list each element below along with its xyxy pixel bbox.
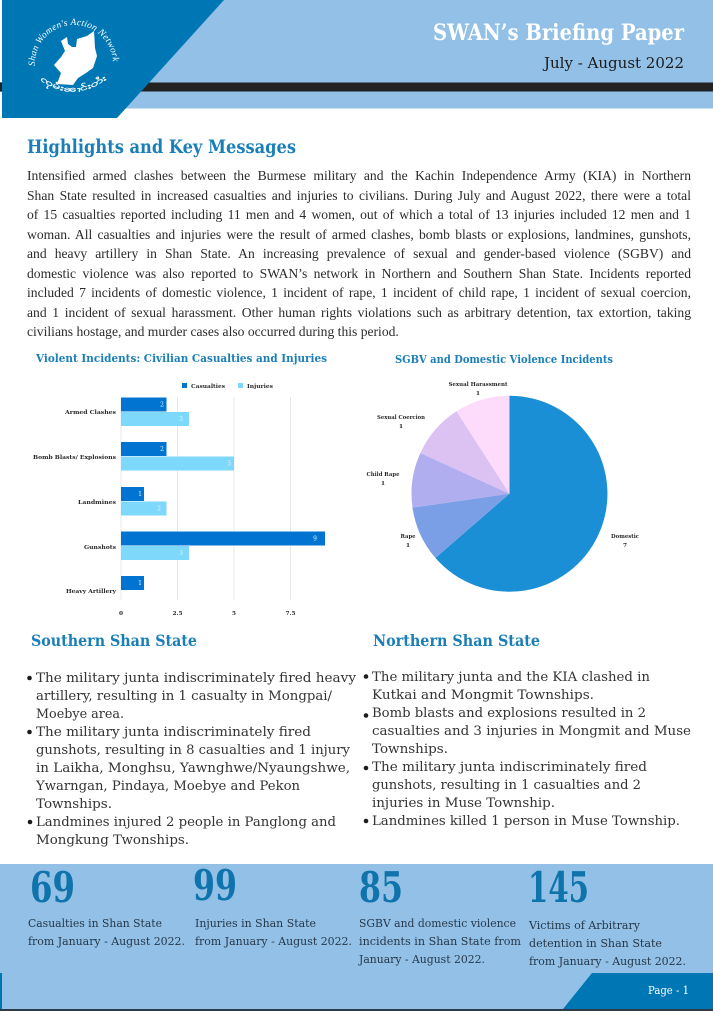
stat: SGBV incidents <box>358 863 521 966</box>
text block: highlights paragraph: woman. All casualties and injuries were the result of armed clashes, bomb blasts or explosions, landmines, gunshots, <box>27 226 691 242</box>
bars: armed clashes <box>64 398 189 426</box>
header title: SWAN’s Briefing Paper <box>433 20 684 46</box>
panel: southern shan state <box>27 631 356 848</box>
northern heading: Northern Shan State <box>373 631 540 650</box>
text block: highlights paragraph: civilians hostage, and murder cases also occurred during this period. <box>27 324 399 339</box>
northern bullets <box>364 670 691 829</box>
pie labels: Domestic <box>611 534 639 540</box>
pie labels: 7 <box>623 543 627 549</box>
logo: circular organisation name: Shan Women's Action Network <box>28 18 120 66</box>
header date: July - August 2022 <box>542 54 684 72</box>
southern bullets <box>27 671 356 848</box>
northern bullets: Bomb blasts and explosions resulted in 2 <box>372 706 646 721</box>
southern bullets: Mongkung Twonships. <box>36 833 189 848</box>
southern bullets: in Laikha, Monghsu, Yawnghwe/Nyaungshwe, <box>36 761 350 776</box>
bar chart legend <box>182 383 274 390</box>
pie labels: 1 <box>476 391 480 397</box>
bar chart axis labels: 5 <box>232 611 236 617</box>
bars: bomb blasts <box>33 442 234 470</box>
pie labels: Sexual Coercion <box>377 415 426 421</box>
bar chart legend: Casualties <box>191 384 226 390</box>
stat: arbitrary detention <box>528 863 686 968</box>
stat: injuries: Injuries in Shan State <box>195 917 316 930</box>
bar value labels: 5 <box>228 460 232 468</box>
pie labels: Sexual Harassment <box>448 382 508 388</box>
stat: arbitrary detention: Victims of Arbitrary <box>528 919 641 932</box>
southern bullets: artillery, resulting in 1 casualty in Mongpai/ <box>36 689 332 704</box>
heading: highlights: Highlights and Key Messages <box>27 136 296 158</box>
text block: highlights paragraph: and heavy artillery in Shan State. An increasing prevalence of sexual and gender-based violence (SGBV) and <box>27 246 691 261</box>
text block: highlights paragraph <box>27 168 691 339</box>
southern bullets: Ywarngan, Pindaya, Moebye and Pekon <box>35 779 300 794</box>
bars: armed clashes: Armed Clashes <box>64 410 117 416</box>
stat: casualties: 69 <box>30 863 75 912</box>
southern bullets: gunshots, resulting in 8 casualties and 1 injury <box>36 743 350 758</box>
northern bullets: gunshots, resulting in 1 casualties and 2 <box>372 778 641 793</box>
bar chart title: Violent Incidents: Civilian Casualties and Injuries <box>35 351 327 365</box>
bar value labels: 1 <box>138 580 142 587</box>
bars: heavy artillery <box>66 576 144 595</box>
bar value labels: 9 <box>313 536 317 542</box>
text block: highlights paragraph: of 15 casualties reported including 11 men and 4 women, out of which a total of 13 injuries included 12 men and 1 <box>27 207 691 222</box>
panel: northern shan state <box>364 631 691 829</box>
bar chart legend: Injuries <box>247 384 274 390</box>
bar value labels: 3 <box>179 550 183 557</box>
page number tab <box>563 973 713 1009</box>
stat: injuries <box>193 861 352 948</box>
bars: gunshots: Gunshots <box>84 545 117 551</box>
pie labels: Child Rape <box>366 472 400 478</box>
header band <box>0 0 713 118</box>
bar value labels <box>138 402 317 587</box>
stat: casualties: from January - August 2022. <box>28 935 185 948</box>
stat: SGBV incidents: incidents in Shan State from <box>359 935 521 948</box>
northern bullets: Kutkai and Mongmit Townships. <box>372 688 594 703</box>
page number tab: Page - 1 <box>648 983 689 997</box>
stat: injuries: 99 <box>193 861 237 910</box>
bar chart: violent incidents <box>33 351 327 617</box>
text block: highlights paragraph: included 7 incidents of domestic violence, 1 incident of rape, 1 incident of child rape, 1 incident of sexual coercion, <box>27 285 691 300</box>
southern bullets: Moebye area. <box>36 707 124 722</box>
bars: gunshots <box>84 532 325 560</box>
bar value labels: 1 <box>138 491 142 498</box>
logo: map and dancer silhouette <box>54 31 97 85</box>
pie labels: 1 <box>381 481 385 487</box>
stat: injuries: from January - August 2022. <box>195 935 352 948</box>
text block: highlights paragraph: and 1 incident of sexual harassment. Other human rights violations such as arbitrary detention, tax extortion, taking <box>27 304 691 320</box>
northern bullets: The military junta indiscriminately fired <box>372 760 647 775</box>
text block: highlights paragraph: domestic violence was also reported to SWAN’s network in Northern and Southern Shan State. Incidents reported <box>27 266 691 280</box>
stat: casualties <box>28 863 185 948</box>
text block: highlights paragraph: Shan State resulted in increased casualties and injuries to civilians. During July and August 2022, there were a total <box>27 188 691 202</box>
southern bullets: Landmines injured 2 people in Panglong and <box>36 815 336 830</box>
bar value labels: 2 <box>157 506 161 512</box>
pie labels: Rape <box>400 534 416 540</box>
bars: heavy artillery: Heavy Artillery <box>66 589 117 595</box>
stat: casualties: Casualties in Shan State <box>28 917 162 930</box>
stat: SGBV incidents: January - August 2022. <box>358 953 485 966</box>
logo: Shan script motto: ၸုမ်းၼၢင်းတႆး <box>41 76 106 92</box>
logo panel <box>2 0 224 118</box>
stat: arbitrary detention: detention in Shan State <box>529 937 662 950</box>
stat: arbitrary detention: 145 <box>528 863 589 912</box>
pie labels: 1 <box>399 424 403 430</box>
southern heading: Southern Shan State <box>31 631 197 650</box>
bar value labels: 2 <box>160 402 164 408</box>
footer band <box>0 864 713 1011</box>
bars: landmines: Landmines <box>78 500 117 506</box>
pie slices <box>412 396 607 592</box>
text block: highlights paragraph: Intensified armed clashes between the Burmese military and the Kachin Independence Army (KIA) in Northern <box>27 168 691 183</box>
bar chart axis labels: 7.5 <box>285 611 296 617</box>
bar chart axis labels <box>119 611 296 617</box>
southern bullets: Townships. <box>36 797 112 812</box>
pie labels <box>366 382 639 549</box>
pie labels: 1 <box>406 543 410 549</box>
bar chart grid lines <box>121 397 290 600</box>
southern bullets: The military junta indiscriminately fired <box>36 725 311 740</box>
bars: landmines <box>78 487 166 516</box>
bar chart axis labels: 2.5 <box>172 611 183 617</box>
stat: arbitrary detention: from January - August 2022. <box>529 955 686 968</box>
stat: SGBV incidents: SGBV and domestic violence <box>359 917 516 930</box>
pie chart: SGBV and domestic violence <box>366 352 639 592</box>
bars: bomb blasts: Bomb Blasts/ Explosions <box>33 455 117 461</box>
stat: SGBV incidents: 85 <box>359 863 403 912</box>
bar chart axis labels: 0 <box>119 611 123 617</box>
bar value labels: 3 <box>179 416 183 423</box>
northern bullets: injuries in Muse Township. <box>372 796 555 811</box>
northern bullets: Townships. <box>372 742 448 757</box>
northern bullets: Landmines killed 1 person in Muse Township. <box>372 814 680 829</box>
pie chart title: SGBV and Domestic Violence Incidents <box>395 352 613 366</box>
northern bullets: The military junta and the KIA clashed in <box>372 670 650 685</box>
southern bullets: The military junta indiscriminately fired heavy <box>36 671 356 686</box>
northern bullets: casualties and 3 injuries in Mongmit and Muse <box>372 724 691 739</box>
bar value labels: 2 <box>160 446 164 453</box>
